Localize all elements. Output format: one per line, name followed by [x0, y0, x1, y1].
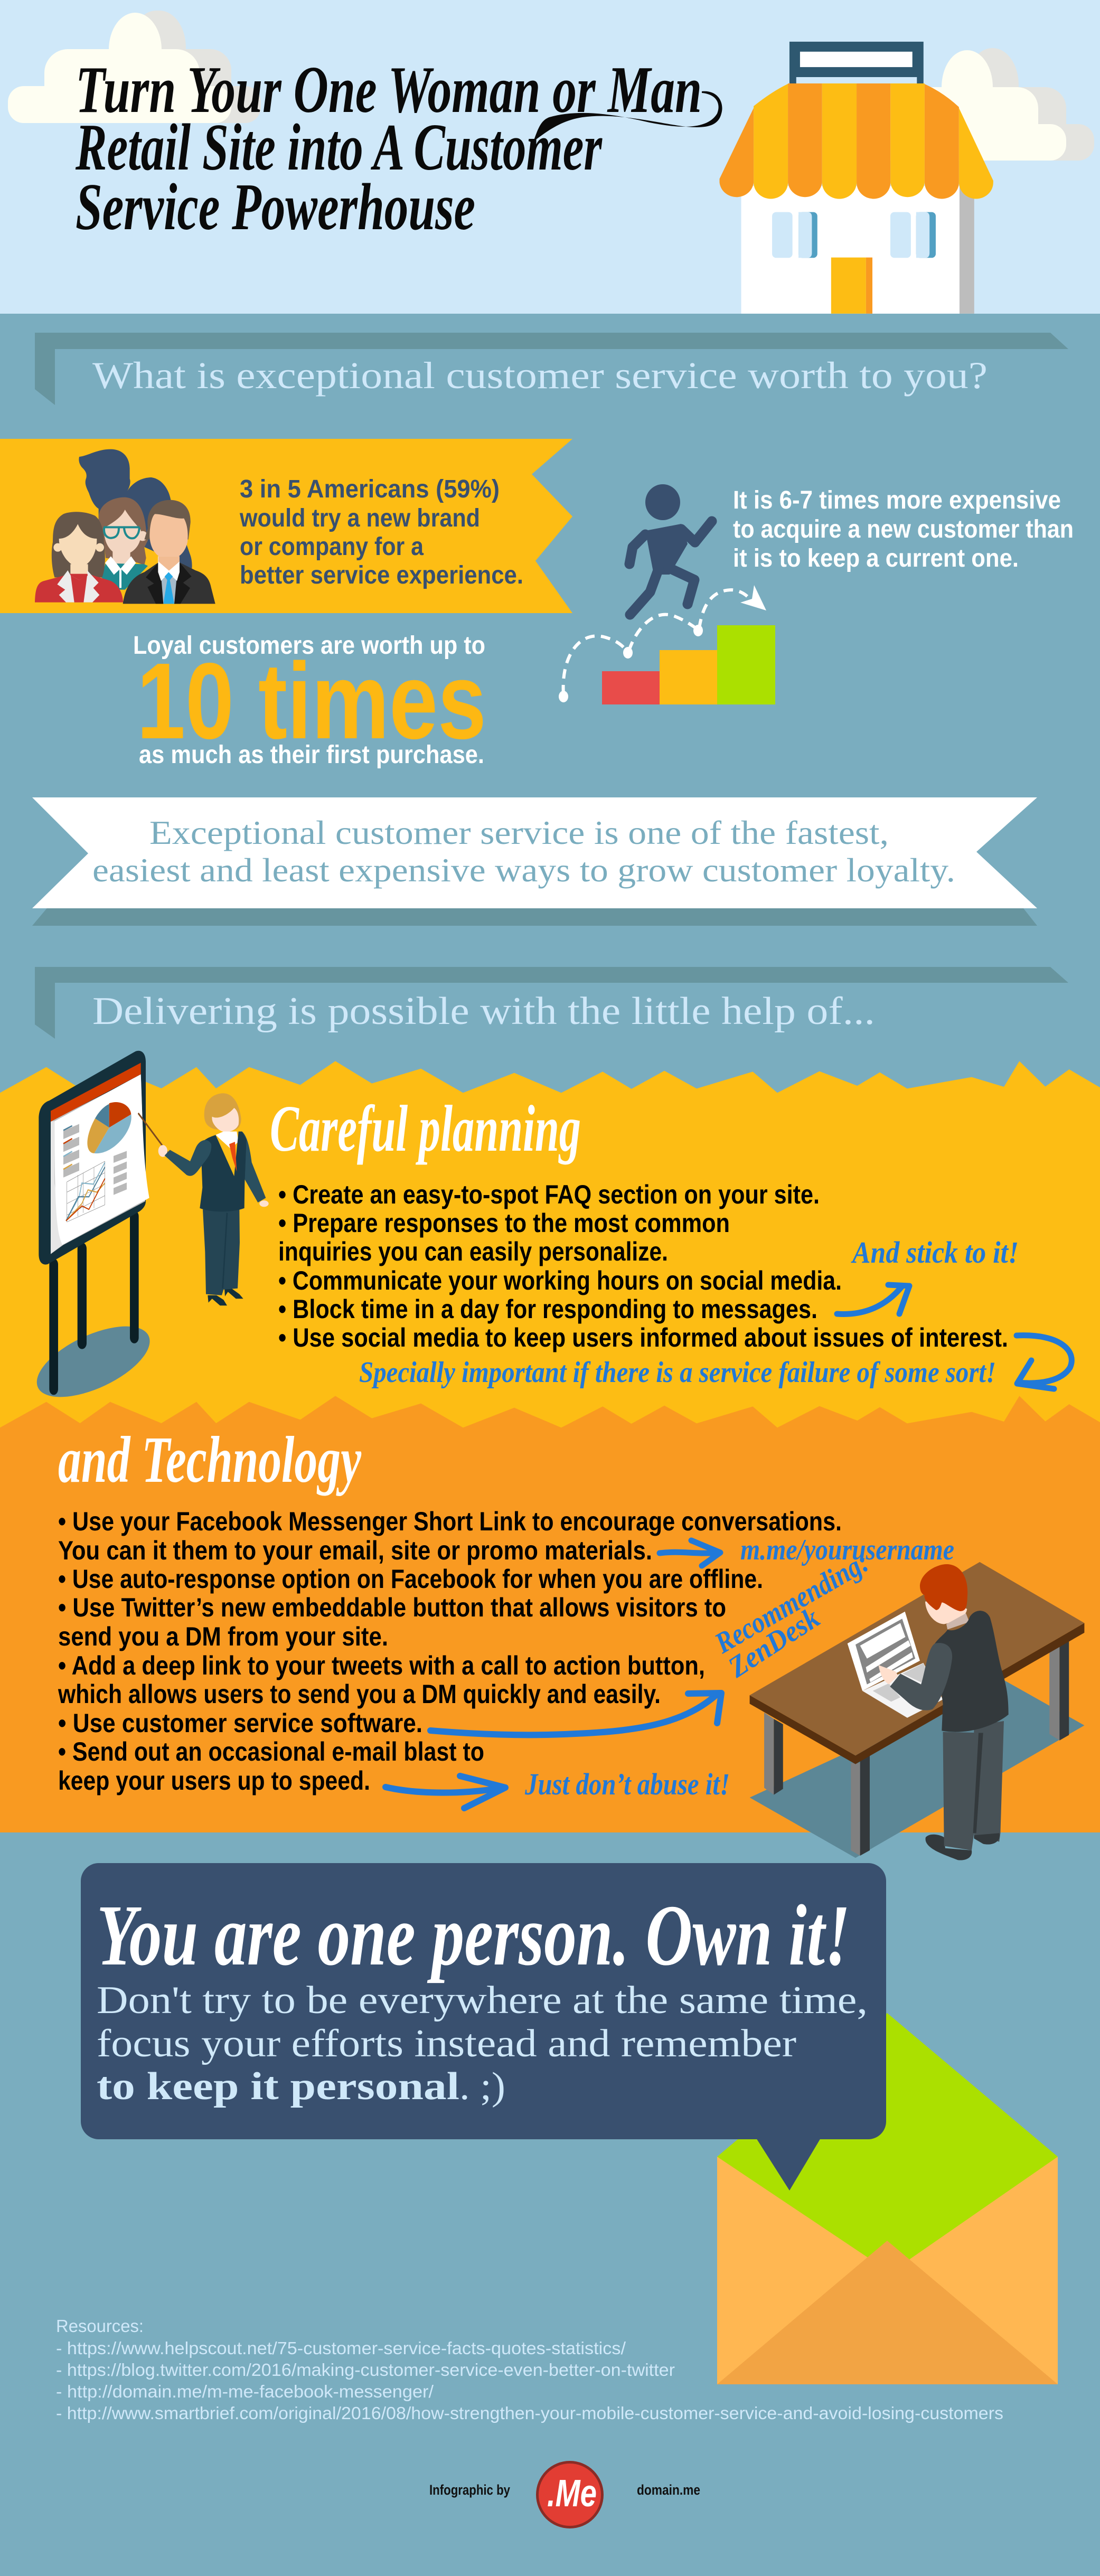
list: planning tips: • Block time in a day for responding to messages.	[278, 1294, 817, 1324]
heading: you are one person: You are one person. Own it!	[97, 1887, 850, 1983]
list: planning tips: • Prepare responses to the most common	[278, 1208, 730, 1238]
stair bars	[602, 625, 775, 704]
logo: .Me	[536, 2461, 604, 2528]
list: planning tips	[278, 1180, 1008, 1352]
list: technology tips: send you a DM from your site.	[58, 1622, 388, 1651]
arrow: to and stick to it	[837, 1285, 909, 1314]
panel: careful planning	[0, 1051, 1100, 1446]
text: resources: Resources:	[56, 2316, 144, 2336]
list: technology tips: • Use Twitter’s new embeddable button that allows visitors to	[58, 1593, 726, 1622]
list: technology tips: keep your users up to speed.	[58, 1766, 370, 1795]
title	[75, 53, 722, 244]
text: 3 in 5 Americans	[239, 475, 523, 589]
list: planning tips: • Communicate your working hours on social media.	[278, 1266, 842, 1295]
text: advice: focus your efforts instead and remember	[97, 2022, 796, 2065]
note: m.me/yourusername: m.me/yourusername	[740, 1534, 954, 1566]
section heading ribbon: worth	[35, 333, 1068, 405]
list: technology tips: You can it them to your email, site or promo materials.	[58, 1536, 652, 1565]
dashed jump arrows	[563, 590, 749, 694]
callout banner: exceptional customer service: Exceptional customer service is one of the fastest,	[149, 814, 889, 851]
section heading ribbon: delivering	[35, 967, 1068, 1039]
list: planning tips: • Use social media to keep users informed about issues of interest.	[278, 1323, 1008, 1352]
stat: 10 times: Loyal customers are worth up to	[133, 632, 485, 660]
list: technology tips: • Send out an occasional e-mail blast to	[58, 1737, 484, 1766]
heading: and technology: and Technology	[58, 1424, 361, 1497]
icon: group of people	[35, 449, 215, 604]
arrow: to m.me link	[660, 1540, 720, 1566]
title: Service Powerhouse	[76, 171, 475, 244]
illustration: presenter woman	[138, 1093, 269, 1305]
footer credit	[429, 2461, 700, 2528]
callout banner: exceptional customer service: easiest and least expensive ways to grow customer loyalty.	[92, 851, 955, 889]
runner	[629, 484, 712, 615]
text: resources: - https://www.helpscout.net/75-customer-service-facts-quotes-statistics/	[56, 2338, 626, 2358]
icon: envelope	[717, 2013, 1058, 2384]
title: Turn Your One Woman or Man	[76, 53, 702, 127]
panel: and technology	[0, 1396, 1100, 1860]
stat: 10 times: as much as their first purchase.	[139, 741, 484, 769]
text: 3 in 5 Americans: better service experience.	[240, 561, 523, 589]
list: technology tips	[58, 1507, 842, 1795]
icon: right cloud	[866, 48, 1094, 161]
text: advice	[97, 1979, 868, 2108]
list: planning tips: inquiries you can easily personalize.	[278, 1237, 668, 1266]
list: technology tips: • Use customer service software.	[58, 1708, 422, 1738]
illustration: man at desk	[750, 1562, 1084, 1860]
text: 3 in 5 Americans: would try a new brand	[239, 504, 480, 532]
arrow: to recommending zendesk	[430, 1693, 721, 1735]
text: 6-7 times more expensive: it is to keep a current one.	[733, 544, 1019, 572]
note: zendesk: ZenDesk	[722, 1601, 825, 1684]
icon: left cloud	[8, 11, 261, 123]
text: resources: - https://blog.twitter.com/2016/making-customer-service-even-better-on-twitter	[56, 2360, 675, 2380]
text: advice: . ;)	[459, 2065, 505, 2108]
icon: shop house	[719, 42, 993, 314]
note: just don't abuse it: Just don’t abuse it!	[524, 1767, 730, 1801]
heading: careful planning: Careful planning	[270, 1093, 581, 1165]
text: 3 in 5 Americans: or company for a	[240, 533, 424, 561]
text: resources	[56, 2316, 1003, 2423]
list: technology tips: • Use auto-response option on Facebook for when you are offline.	[58, 1564, 763, 1594]
arrow: to specially important	[1017, 1336, 1071, 1389]
stat: 10 times: 10 times	[137, 641, 486, 761]
icon: running figure on stairs	[559, 484, 775, 704]
arrow: to just don't abuse it	[386, 1776, 505, 1808]
text: resources: - http://www.smartbrief.com/original/2016/08/how-strengthen-your-mobile-customer-service-and-avoid-losing-customers	[56, 2403, 1003, 2423]
logo: .Me: .Me	[547, 2472, 597, 2515]
callout banner: exceptional customer service	[32, 797, 1037, 926]
text: 3 in 5 Americans: 3 in 5 Americans (59%)	[240, 475, 500, 503]
text: advice: Don't try to be everywhere at the same time,	[97, 1979, 868, 2022]
header sky panel	[0, 0, 1100, 314]
section heading ribbon: delivering: Delivering is possible with the little help of...	[92, 990, 875, 1033]
text: 6-7 times more expensive: It is 6-7 times more expensive	[733, 486, 1061, 514]
text: resources: - http://domain.me/m-me-facebook-messenger/	[56, 2382, 434, 2401]
illustration: presentation board	[31, 1051, 156, 1412]
text: advice: to keep it personal	[97, 2065, 459, 2108]
note: specially important: Specially important if there is a service failure of some sort!	[359, 1356, 996, 1389]
speech bubble	[81, 1863, 886, 2190]
text: 6-7 times more expensive	[733, 486, 1074, 572]
title: Retail Site into A Customer	[75, 111, 603, 184]
list: planning tips: • Create an easy-to-spot FAQ section on your site.	[278, 1180, 820, 1209]
list: technology tips: • Use your Facebook Messenger Short Link to encourage conversations.	[58, 1507, 842, 1536]
note: and stick to it: And stick to it!	[851, 1235, 1019, 1270]
panel: yellow stat banner	[0, 439, 572, 613]
list: technology tips: • Add a deep link to your tweets with a call to action button,	[58, 1651, 705, 1680]
footer credit: Infographic by	[429, 2482, 510, 2498]
footer credit: domain.me	[637, 2482, 700, 2498]
note: recommending: Recommending:	[709, 1546, 875, 1660]
section heading ribbon: worth: What is exceptional customer service worth to you?	[92, 354, 988, 397]
list: technology tips: which allows users to send you a DM quickly and easily.	[58, 1679, 661, 1709]
